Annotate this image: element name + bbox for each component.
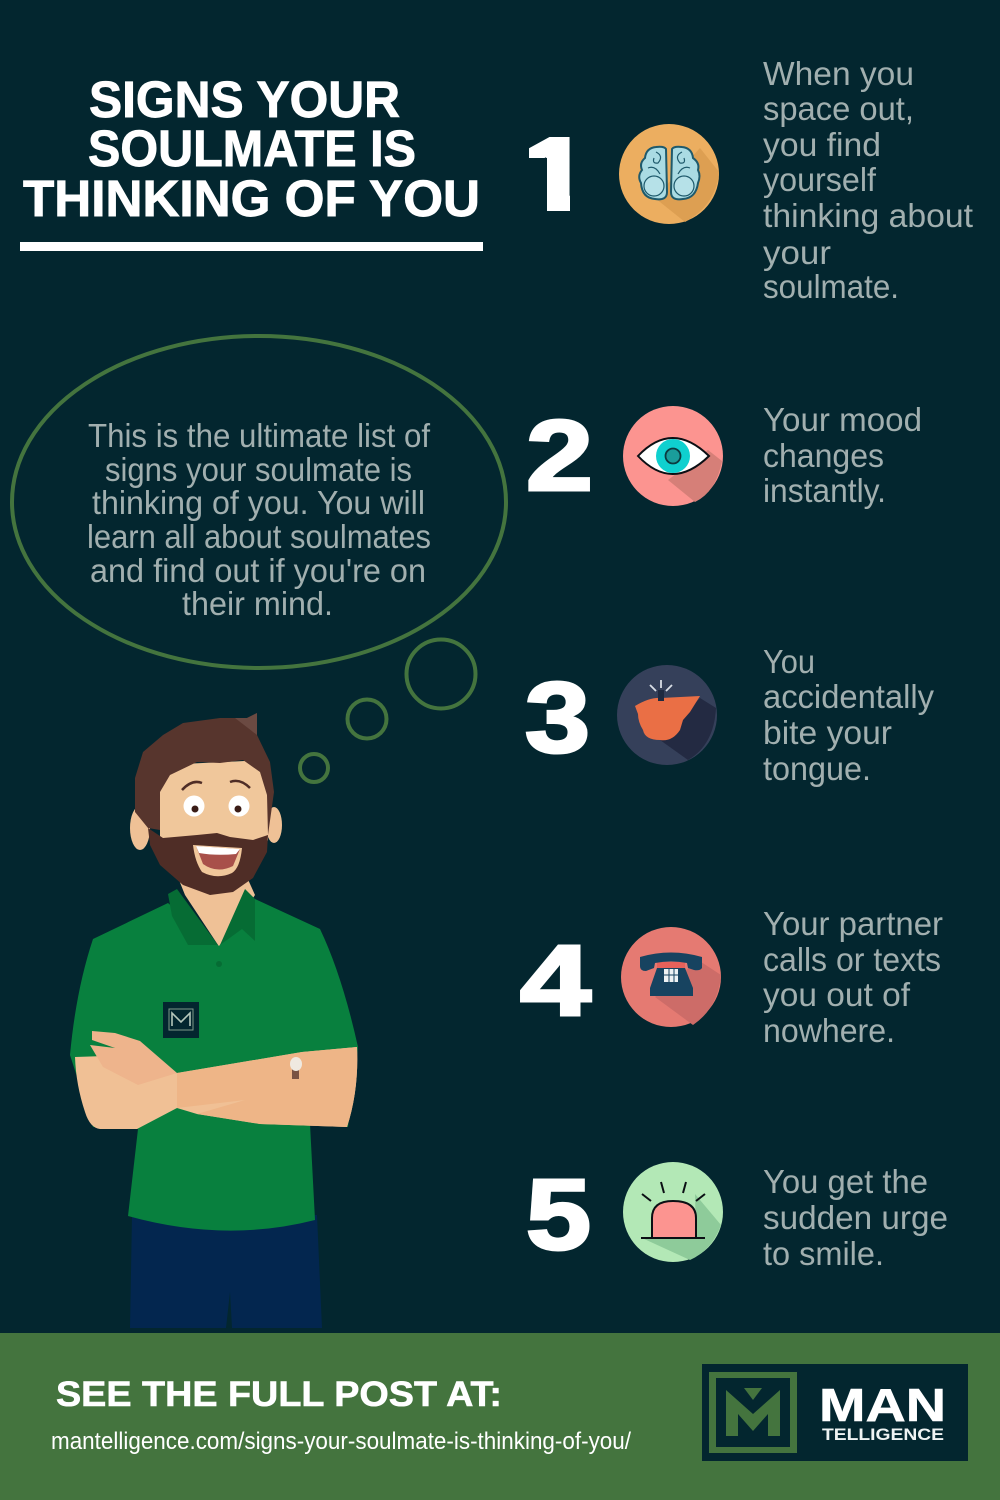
title [23,71,480,227]
item 5 [526,1159,948,1272]
number 2: 2 [526,400,593,512]
text 3 [763,643,934,787]
number 5: 5 [526,1159,591,1271]
mouth [193,845,242,876]
ears [130,806,282,850]
text 1: your [763,234,831,271]
number 1: 1 [522,119,588,231]
footer heading: SEE THE FULL POST AT: [56,1375,502,1414]
text 1: you find [763,126,881,163]
icon: whistle [617,665,717,765]
crossed arms [75,1031,357,1129]
lower arm [75,1047,357,1129]
hair [135,713,274,835]
item 1 [522,55,973,305]
footer band [0,1333,1000,1500]
text 1: When you [763,55,914,92]
title underline [20,242,483,251]
icon: telephone [621,927,721,1027]
text 1: soulmate. [763,268,899,305]
text 4: you out of [763,976,911,1013]
hair tuft [235,713,257,735]
number 3: 3 [525,662,590,774]
forearm [177,1047,357,1127]
item 2 [526,400,922,512]
bubble text: thinking of you. You will [92,484,425,521]
title: THINKING OF YOU [23,170,480,227]
thought circles [300,640,476,782]
hand [90,1031,177,1085]
bubble text: learn all about soulmates [87,518,431,555]
eyes [182,781,250,816]
text 3: bite your [763,714,892,751]
title: SIGNS YOUR [89,71,400,128]
shirt badge [163,1002,199,1038]
bubble outline [12,336,506,668]
bubble text [87,417,431,622]
wristwatch [290,1057,302,1079]
bubble text: signs your soulmate is [105,451,412,488]
text 2 [763,401,922,509]
beard [148,828,268,895]
text 1: yourself [763,161,877,198]
shirt [70,899,358,1231]
neck [177,875,255,948]
text 4: nowhere. [763,1012,895,1049]
text 3: accidentally [763,678,934,715]
character [70,713,358,1328]
text 3: You [763,643,815,680]
text 2: Your mood [763,401,922,438]
title: SOULMATE IS [88,120,416,177]
collar [168,889,255,967]
item 3 [525,643,934,787]
text 5: You get the [763,1163,928,1200]
thought bubble [12,336,506,782]
logo wordmark: TELLIGENCE [822,1425,944,1444]
icon: siren [623,1162,723,1262]
text 4: Your partner [763,905,943,942]
bubble text: and find out if you're on [90,552,426,589]
text 4 [763,905,943,1049]
bubble text: their mind. [182,585,333,622]
item 4 [520,905,943,1049]
text 1: thinking about [763,197,973,234]
logo mark [709,1372,797,1453]
text 5 [763,1163,948,1272]
pants [130,1215,322,1328]
icon: eye [623,406,723,506]
bubble text: This is the ultimate list of [88,417,431,454]
text 2: changes [763,437,884,474]
text 4: calls or texts [763,941,941,978]
text 3: tongue. [763,750,871,787]
text 5: to smile. [763,1235,884,1272]
text 5: sudden urge [763,1199,948,1236]
logo wordmark: MAN [819,1379,946,1431]
text 1: space out, [763,90,914,127]
icon: brain [619,124,719,224]
logo wordmark [819,1379,946,1444]
face [160,760,268,870]
number 4: 4 [520,925,591,1037]
footer url: mantelligence.com/signs-your-soulmate-is-thinking-of-you/ [51,1428,631,1455]
text 1 [763,55,973,305]
logo [702,1364,968,1461]
text 2: instantly. [763,472,886,509]
